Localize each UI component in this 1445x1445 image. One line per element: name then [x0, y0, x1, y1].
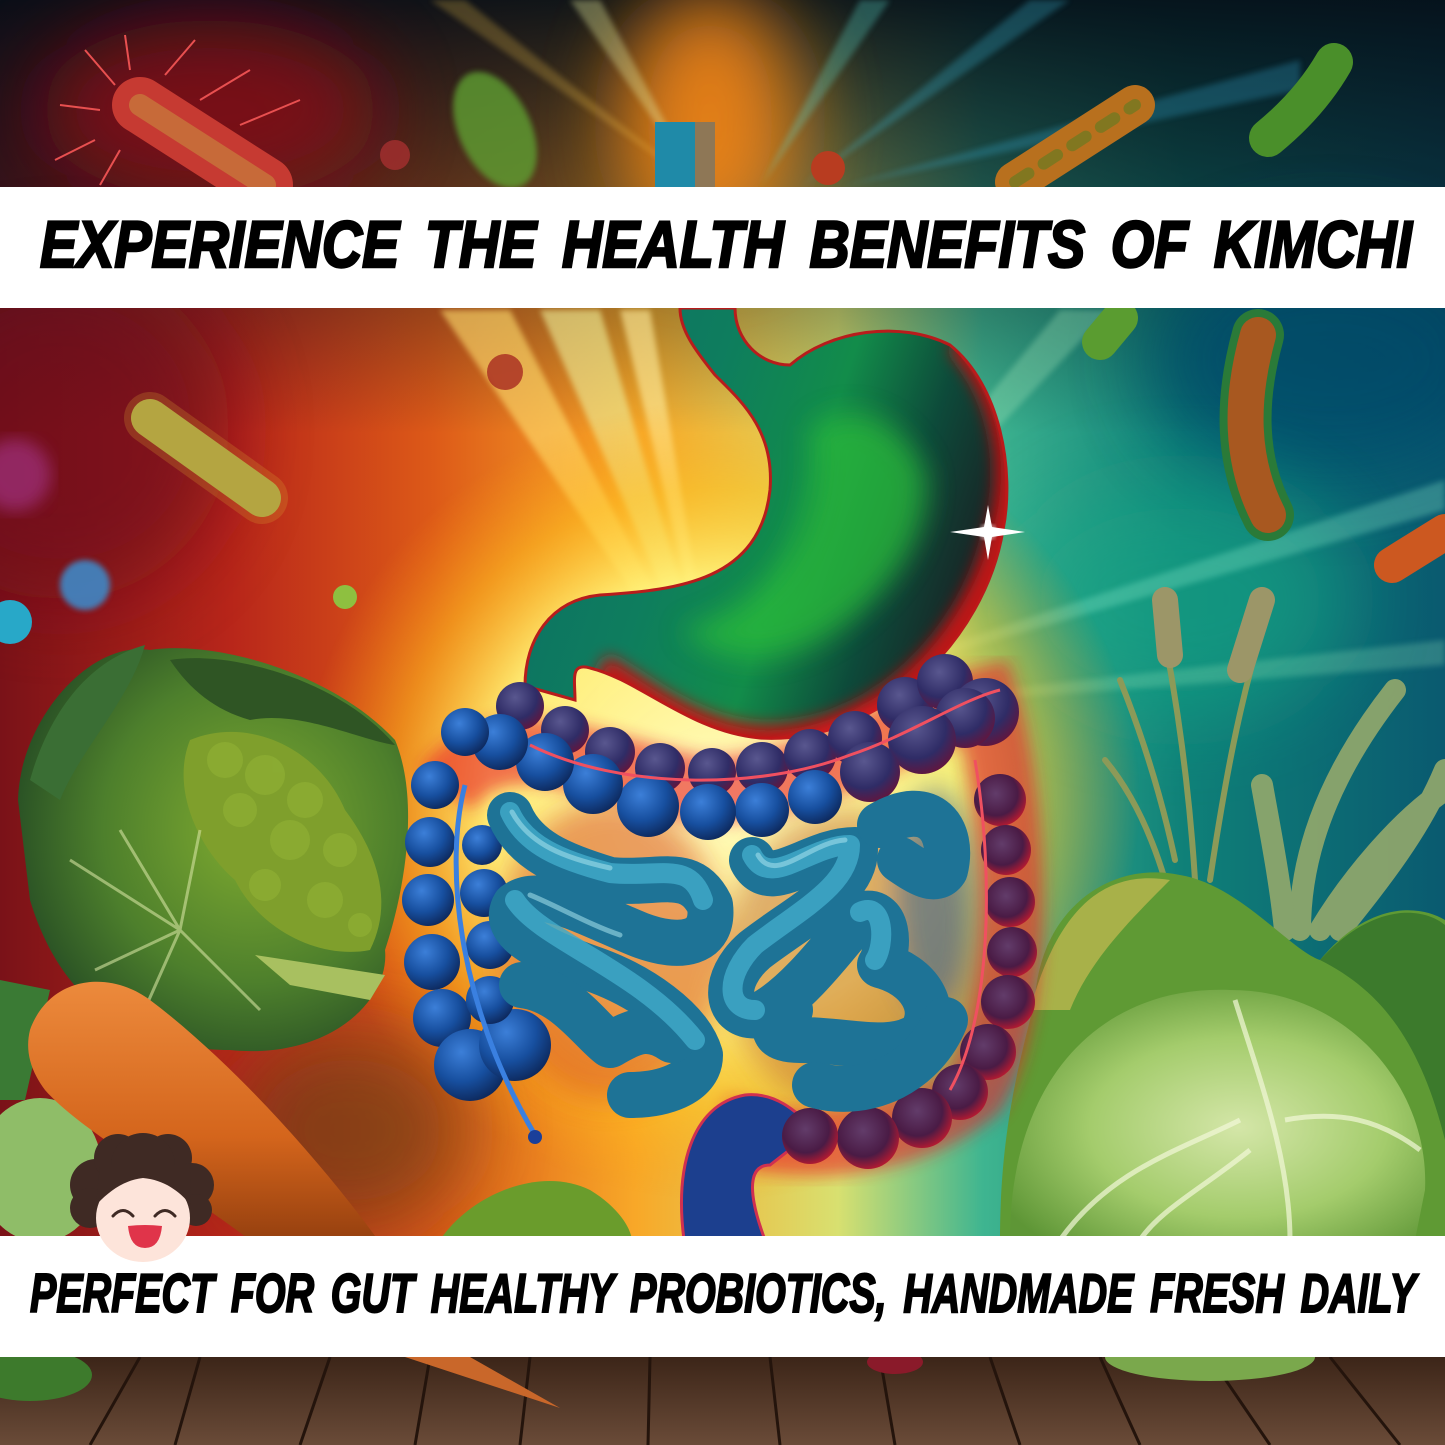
intestine backdrop	[495, 790, 975, 1110]
bacterium: small green right	[1100, 318, 1120, 342]
haustra beads	[402, 654, 1037, 1169]
small intestine	[510, 812, 947, 1095]
band: bottom tagline	[0, 1236, 1445, 1357]
red strand	[530, 690, 1000, 1090]
icon: smiling mascot face	[70, 1133, 214, 1262]
bacterium: red top-left	[55, 35, 300, 185]
stomach	[525, 308, 1011, 740]
esophagus tube top	[655, 122, 715, 187]
bacterium: orange right	[1246, 335, 1268, 515]
cabbage: savoy left	[18, 645, 408, 1051]
carrot	[28, 982, 378, 1240]
bacterium: orange top-right	[1015, 105, 1135, 182]
bacterium: orange right edge	[1392, 532, 1445, 565]
cabbage: right	[1000, 872, 1445, 1240]
appendix strand	[456, 785, 542, 1144]
microbes: small round	[0, 140, 845, 644]
sparkle on stomach	[950, 505, 1025, 560]
vegetable at top centre	[436, 59, 554, 201]
bacterium: green left	[150, 418, 262, 498]
bacteria and microbes	[0, 35, 1445, 930]
colon: large intestine	[402, 654, 1037, 1240]
broccoli bottom centre	[440, 1181, 632, 1240]
bacterium: green top-right	[1268, 62, 1334, 138]
wood floor	[0, 1357, 1445, 1445]
cabbage: left lower	[0, 980, 102, 1242]
foliage strip under bottom band	[0, 1333, 1315, 1401]
band: top headline	[0, 187, 1445, 308]
carrot tip on floor	[405, 1357, 560, 1408]
descending colon tail	[682, 1095, 815, 1240]
plants right	[1105, 600, 1445, 930]
